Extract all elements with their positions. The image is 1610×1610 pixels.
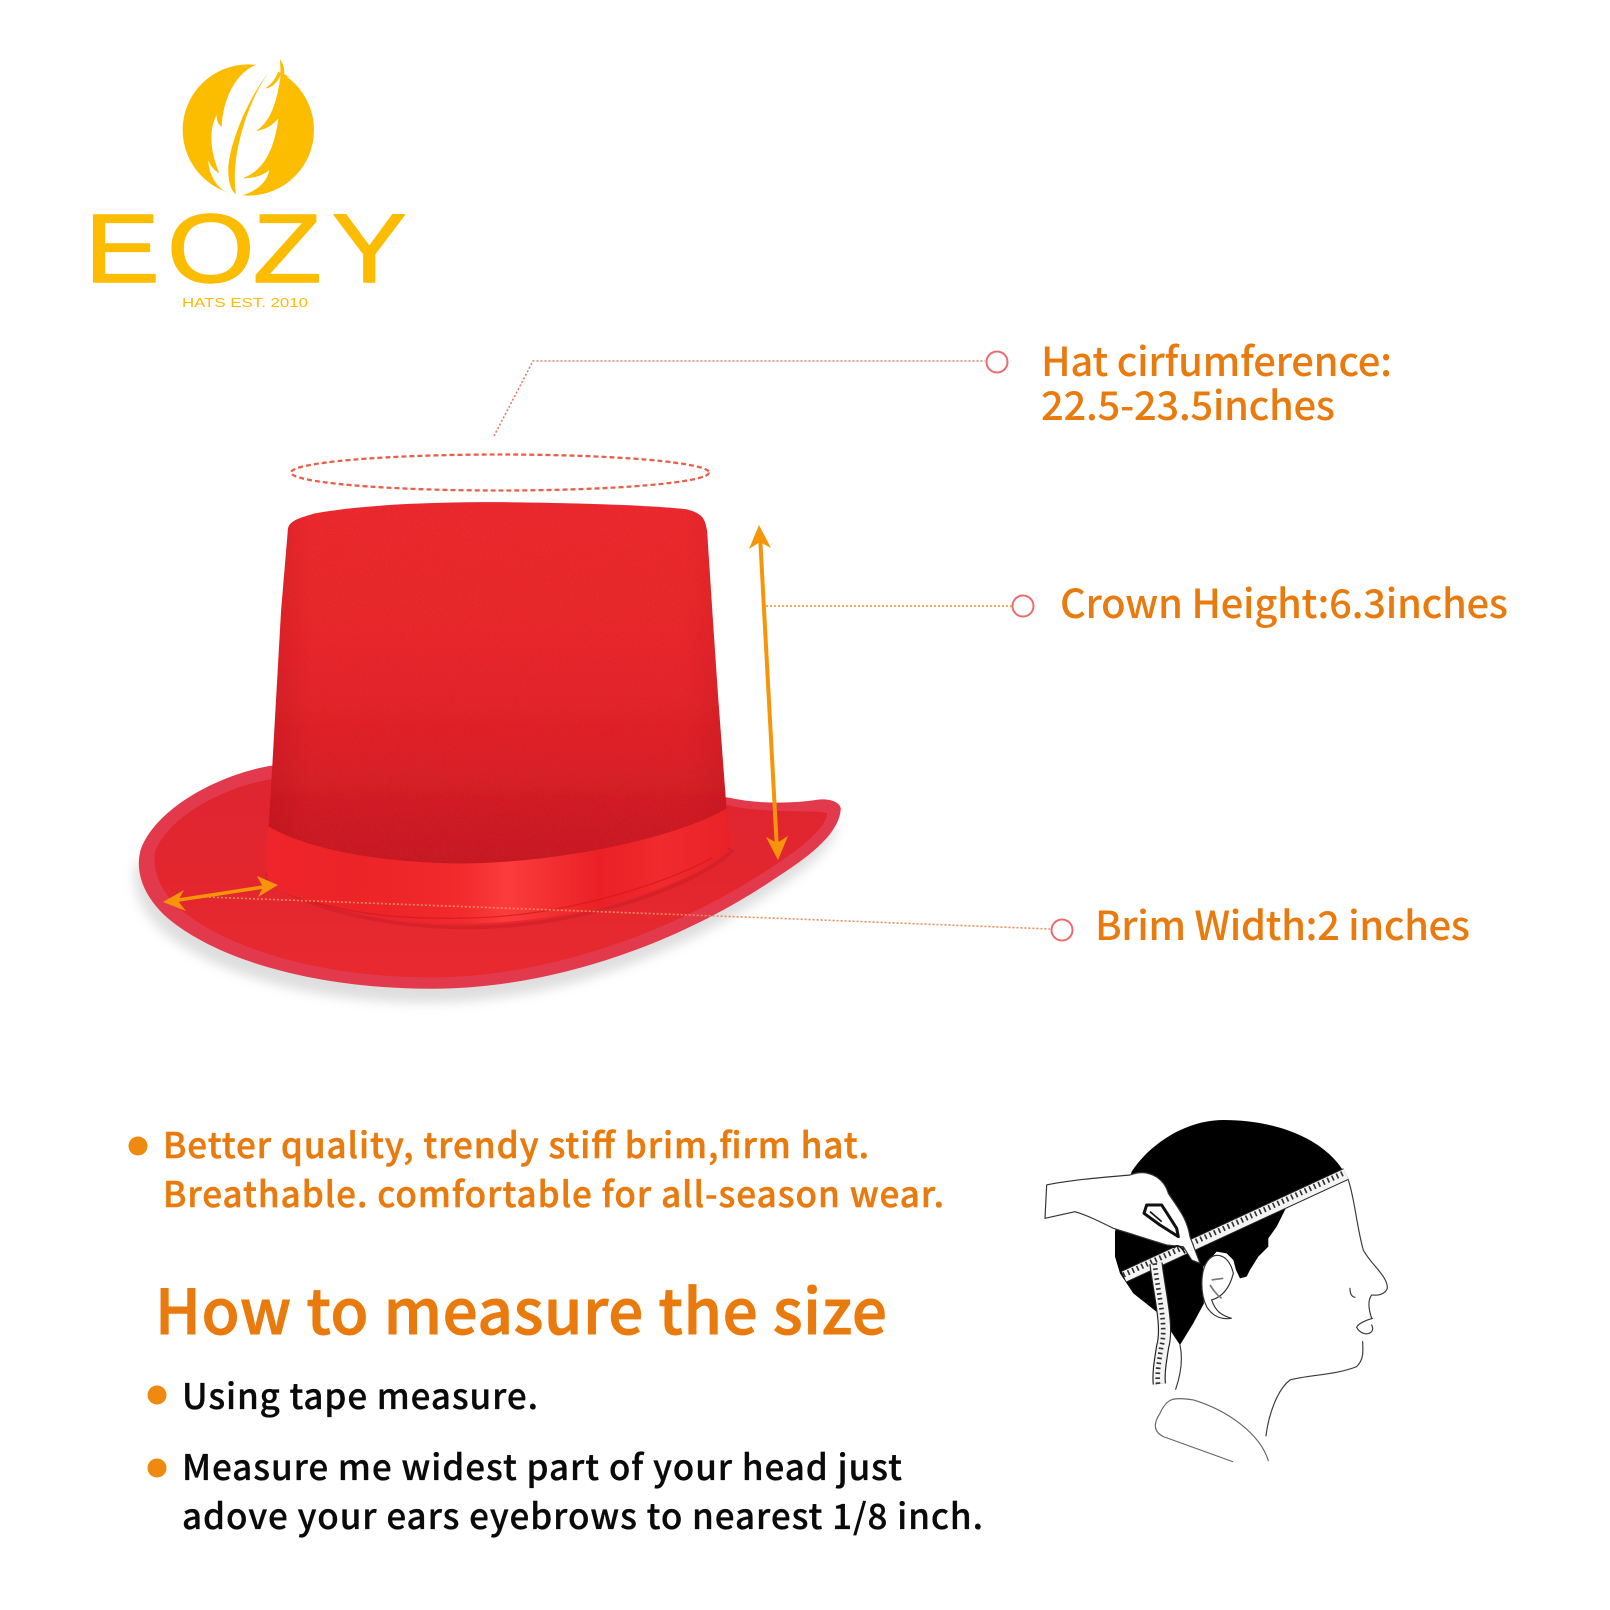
hat ribbon [265, 809, 730, 923]
marker circle [1012, 596, 1034, 616]
bullet [128, 1136, 148, 1156]
feature bullet text: Better quality, trendy stiff brim,firm hat. [163, 1118, 869, 1169]
ear [1202, 1255, 1233, 1319]
measuring tape across head [1123, 1172, 1346, 1277]
hat shadow [135, 823, 837, 1003]
hat photo [135, 502, 841, 1003]
label: brim width: Brim Width:2 inches [1095, 894, 1470, 952]
hand holding tape [1045, 1173, 1200, 1263]
bullet [148, 1458, 166, 1478]
face and neck outline [1176, 1180, 1387, 1436]
bullet [148, 1386, 166, 1404]
collar outline [1155, 1399, 1268, 1462]
instruction: measure head [148, 1440, 983, 1540]
arrow: crown height [749, 525, 788, 860]
instruction: tape measure: Using tape measure. [182, 1369, 538, 1420]
arrow: brim width [163, 876, 278, 911]
hat crown [266, 502, 730, 876]
feature bullet text: Breathable. comfortable for all-season wear. [163, 1167, 944, 1218]
marker circle [1052, 920, 1072, 940]
icon: feather in circle [183, 59, 314, 196]
illustration: head being measured [1045, 1120, 1387, 1462]
hair [1115, 1120, 1348, 1345]
logo tagline: HATS EST. 2010 [182, 295, 308, 310]
label: crown height: Crown Height:6.3inches [1060, 572, 1508, 630]
marker circle [986, 352, 1008, 372]
instruction: measure head: adove your ears eyebrows to nearest 1/8 inch. [182, 1489, 983, 1540]
logo: EOZY hats [85, 59, 407, 310]
circumference dashed ellipse [291, 454, 709, 490]
leader: crown height [766, 596, 1034, 616]
label: hat circumference: Hat cirfumference: [1041, 330, 1392, 388]
leader: brim width [205, 897, 1072, 940]
label: hat circumference: 22.5-23.5inches [1041, 374, 1335, 432]
heading: How to measure the size [155, 1262, 887, 1352]
leader: circumference [494, 352, 1008, 436]
hat brim [139, 766, 841, 989]
feature bullet text [128, 1118, 944, 1218]
logo wordmark: EOZY [85, 195, 407, 303]
hanging tape end [1155, 1263, 1165, 1384]
instruction: measure head: Measure me widest part of your head just [182, 1440, 902, 1491]
